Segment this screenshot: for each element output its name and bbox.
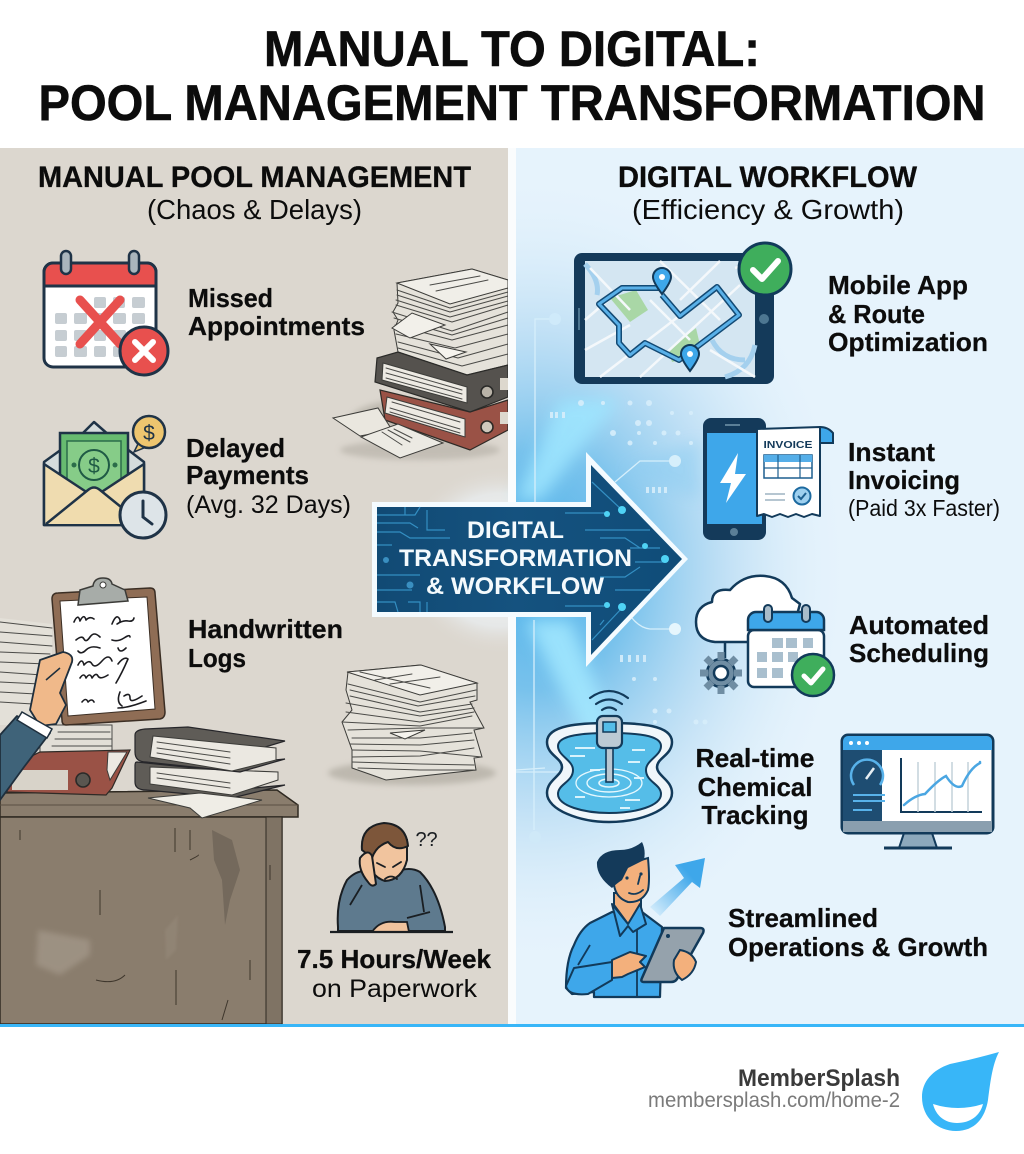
title: POOL MANAGEMENT TRANSFORMATION xyxy=(38,75,986,131)
panel: digital workflow xyxy=(516,148,1024,1024)
label: streamlined operations and growth: Operations & Growth xyxy=(728,932,988,962)
icon: calendar missed xyxy=(44,251,168,375)
label: automated scheduling: Scheduling xyxy=(849,638,989,668)
label: delayed payments: Payments xyxy=(186,460,309,490)
red binder xyxy=(380,390,508,450)
central arrow: digital transformation and workflow: TRANSFORMATION xyxy=(399,545,632,572)
label: delayed payments: (Avg. 32 Days) xyxy=(186,491,351,519)
loose papers xyxy=(333,408,392,436)
footer band xyxy=(0,1027,1024,1154)
label: automated scheduling xyxy=(849,610,989,668)
heading: manual xyxy=(38,161,471,225)
central arrow: digital transformation and workflow: & WORKFLOW xyxy=(426,573,604,600)
red binder on desk xyxy=(7,750,130,795)
label: 7.5 hours per week xyxy=(297,944,492,1003)
icon: envelope with money xyxy=(44,416,166,538)
label: handwritten logs xyxy=(188,614,343,673)
title xyxy=(38,21,986,131)
footer brand text: membersplash.com/home-2 xyxy=(648,1089,900,1112)
icon: stressed worker xyxy=(330,823,453,932)
label: missed appointments xyxy=(188,283,365,341)
illustration: paper and binder stack, top right xyxy=(333,269,508,460)
icon: pool chemical sensor xyxy=(547,691,672,822)
icon: person with tablet and growth arrow xyxy=(566,842,705,997)
label: 7.5 hours per week: on Paperwork xyxy=(312,975,478,1003)
logo: smiling drop xyxy=(922,1052,999,1131)
label: instant invoicing: (Paid 3x Faster) xyxy=(848,495,1000,521)
light rays xyxy=(516,400,700,745)
heading: manual: MANUAL POOL MANAGEMENT xyxy=(38,161,471,194)
binder stack on desk xyxy=(135,762,285,798)
heading: digital workflow xyxy=(618,161,918,225)
icon: tablet route map xyxy=(574,243,791,384)
heading: digital workflow: (Efficiency & Growth) xyxy=(632,194,904,225)
icon: phone with invoice xyxy=(703,418,833,540)
label: 7.5 hours per week: 7.5 Hours/Week xyxy=(297,944,492,974)
label: real-time chemical tracking: Chemical xyxy=(698,772,812,802)
panel: manual pool management xyxy=(0,148,508,1024)
illustration: paper stack, centre left xyxy=(328,665,496,785)
circuit traces xyxy=(377,482,665,640)
label: streamlined operations and growth xyxy=(728,903,988,962)
label: handwritten logs: Handwritten xyxy=(188,614,343,644)
label: real-time chemical tracking xyxy=(696,743,814,830)
label: delayed payments: Delayed xyxy=(186,433,285,463)
label: missed appointments: Missed xyxy=(188,283,273,313)
icon: phone with invoice: INVOICE xyxy=(764,439,812,451)
label: delayed payments xyxy=(186,433,351,519)
icon: envelope with money: $ xyxy=(88,455,100,478)
label: instant invoicing: Instant xyxy=(848,437,935,467)
illustration: left paper stack behind clipboard xyxy=(0,618,112,762)
dark binder xyxy=(375,352,508,412)
centre divider xyxy=(508,148,516,1024)
label: handwritten logs: Logs xyxy=(188,643,246,673)
icon: stressed worker: ? xyxy=(426,829,438,851)
label: instant invoicing: Invoicing xyxy=(848,465,960,495)
heading: digital workflow: DIGITAL WORKFLOW xyxy=(618,161,918,194)
label: real-time chemical tracking: Tracking xyxy=(702,800,808,830)
circuit decoration xyxy=(516,313,708,843)
heading: manual: (Chaos & Delays) xyxy=(147,194,362,225)
label: mobile app and route optimization: Mobile App xyxy=(828,270,968,300)
icon: cloud calendar gear xyxy=(696,576,834,696)
header band xyxy=(0,0,1024,148)
icon: monitor dashboard xyxy=(842,735,993,848)
icon: stressed worker: ? xyxy=(415,829,427,851)
label: mobile app and route optimization xyxy=(828,270,988,357)
footer divider xyxy=(0,1024,1024,1027)
illustration: desk with binders xyxy=(0,727,298,1024)
footer brand text xyxy=(648,1065,900,1112)
label: automated scheduling: Automated xyxy=(849,610,989,640)
footer brand text: MemberSplash xyxy=(738,1065,900,1092)
label: real-time chemical tracking: Real-time xyxy=(696,743,814,773)
label: mobile app and route optimization: Optimization xyxy=(828,327,988,357)
label: instant invoicing xyxy=(848,437,1000,521)
illustration: clipboard held in hand xyxy=(0,578,165,800)
title: MANUAL TO DIGITAL: xyxy=(264,21,760,77)
label: missed appointments: Appointments xyxy=(188,311,365,341)
icon: envelope with money: $ xyxy=(143,422,155,445)
central arrow: digital transformation and workflow xyxy=(372,452,688,667)
central arrow: digital transformation and workflow: DIGITAL xyxy=(467,517,564,544)
label: mobile app and route optimization: & Route xyxy=(828,299,925,329)
label: streamlined operations and growth: Streamlined xyxy=(728,903,878,933)
